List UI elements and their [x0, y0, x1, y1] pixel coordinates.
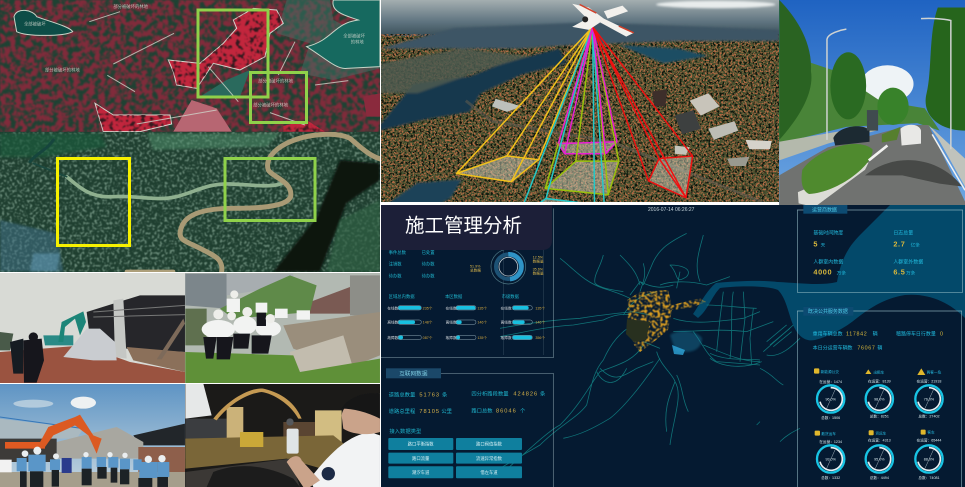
right data column: 人群室外数据	[893, 259, 923, 266]
vehicle donut charts: 总数：8251	[870, 414, 889, 419]
survey footprints	[456, 26, 694, 202]
vehicle donut charts: 总数：1506	[821, 415, 840, 420]
progress bars: 离线数	[387, 320, 399, 325]
right data column: 人群室内数据	[813, 259, 843, 266]
vehicle donut charts: 在运营：65444	[917, 438, 941, 443]
vehicle donut charts: 总数：4494	[870, 475, 889, 480]
left data column	[380, 208, 553, 487]
annotation labels and leader lines: 全部被破坏	[24, 20, 46, 27]
right data column: 运营商数据	[812, 206, 837, 213]
vehicle donut charts: 总数：1332	[821, 475, 840, 480]
river	[30, 134, 382, 272]
donut chart: 12.5%	[533, 255, 544, 259]
right data column: 重用车辆总数	[813, 330, 843, 337]
panel: traffic dashboard	[380, 205, 965, 487]
statistics text: 条	[442, 390, 448, 398]
progress bars: 235个	[423, 305, 433, 310]
progress bars: 在线数	[501, 305, 512, 310]
title block	[381, 205, 552, 250]
panel: inspectors in white shirts at rubble	[185, 273, 380, 384]
progress bars: 故障数	[501, 335, 512, 340]
data type buttons: 流速异常指数	[476, 455, 503, 462]
map: urban core traffic	[626, 290, 706, 355]
right data column: 4000	[813, 267, 832, 276]
statistics text: 道路总里程	[389, 407, 416, 415]
vehicle donut charts: 散货运车	[821, 431, 836, 436]
vehicle donut charts: 货运车	[875, 430, 887, 435]
right data column: 辆	[873, 330, 878, 337]
vehicle donut charts: 在运营：21918	[917, 378, 941, 383]
cars	[833, 126, 870, 146]
progress bars: 故障数	[446, 335, 457, 340]
annotation labels and leader lines: 部分被破坏的林地	[253, 102, 289, 109]
right data column: 稽路停车日行数量	[896, 330, 936, 337]
right data column: 本日分运营车辆数	[813, 345, 853, 352]
annotation labels and leader lines: 部分被破坏的林地	[45, 66, 80, 73]
annotation labels and leader lines: 的林地	[351, 38, 364, 45]
panel: road rendering	[779, 0, 965, 205]
data type buttons: 路口平衡指数	[408, 441, 434, 448]
title block: 施工管理分析	[405, 215, 522, 237]
donut chart: 数据量	[533, 258, 544, 263]
donut chart	[470, 249, 544, 284]
statistics text: 公里	[441, 408, 453, 415]
progress bars: 087个	[423, 335, 433, 340]
right data column: 117842	[846, 331, 867, 337]
donut chart: 51.9%	[470, 264, 481, 268]
right data column	[797, 205, 963, 487]
progress bars: 在线数	[387, 305, 399, 310]
icon: airplane	[572, 4, 634, 37]
left data column: 区域总内数据	[389, 293, 415, 300]
panel: satellite river map	[0, 132, 382, 272]
hedge	[798, 162, 869, 207]
trees	[779, 0, 811, 140]
vehicle donut charts: 96.0%	[825, 397, 837, 401]
progress bars: 故障数	[387, 335, 399, 340]
progress bars: 离线数	[501, 320, 512, 325]
right data column: 6.5	[893, 267, 906, 276]
panel: aerial survey photo	[381, 0, 779, 202]
data type buttons: 路口阀值指数	[476, 441, 503, 448]
vehicle donut charts: 总数：74081	[918, 475, 940, 480]
statistics text: 51763	[419, 392, 440, 398]
left data column: 已处置	[422, 249, 435, 256]
annotation labels and leader lines: 部分被破坏的林地	[113, 3, 149, 10]
vehicle donut charts: 客车	[927, 430, 935, 435]
vehicle donut charts: 76.0%	[924, 397, 935, 401]
statistics text: 路口总数	[471, 406, 493, 414]
vehicle donut charts: 在运营：8139	[868, 378, 891, 383]
right data column: 辆	[877, 345, 882, 352]
right data column: 万条	[906, 269, 916, 276]
icon group: bright red disturbed areas	[95, 8, 380, 132]
progress bars: 146个	[477, 320, 487, 325]
progress bars: 离线数	[446, 320, 457, 325]
panel: night noise measurement	[185, 384, 380, 487]
left data column: 市级数据	[502, 293, 520, 300]
vehicle donut charts: 95.0%	[874, 457, 885, 461]
progress bars: 在线数	[446, 305, 457, 310]
right data column: 76067	[857, 346, 875, 352]
right data column: 基础时间跨度	[813, 229, 843, 236]
left data column: 事件总数	[389, 249, 407, 256]
progress bars: 356个	[535, 335, 545, 340]
data type buttons: 路口流量	[412, 455, 430, 462]
statistics text: 条	[540, 390, 546, 398]
right data column: 亿条	[911, 241, 920, 248]
map: road network	[500, 233, 800, 475]
donut chart: 数据量	[533, 271, 544, 276]
statistics text: 86046	[496, 408, 517, 414]
statistics text: 个	[520, 407, 526, 414]
panel: infrared forest map	[0, 0, 380, 132]
right data column: 5	[813, 239, 818, 248]
left data column: 待办数	[422, 272, 435, 279]
vehicle donut charts: 两客一危	[927, 370, 942, 375]
left data column: 本区数据	[445, 293, 463, 300]
vehicle donut charts: 98.0%	[874, 397, 885, 401]
progress bars: 148个	[423, 320, 433, 325]
progress bars: 135个	[535, 305, 545, 310]
data type buttons: 借左车道	[480, 469, 498, 476]
left data column: 待办数	[422, 261, 435, 268]
progress bars: 135个	[477, 335, 487, 340]
right data column: 2.7	[893, 239, 906, 248]
statistics text: 四分析路段数量	[471, 390, 509, 398]
mottling inside red areas	[96, 8, 321, 132]
vehicle donut charts: 88.0%	[924, 457, 935, 461]
highlight box: green upper	[198, 10, 268, 97]
annotation labels and leader lines: 部分被破坏的林地	[258, 78, 294, 85]
progress bars: 146个	[535, 320, 545, 325]
right data column: 0	[940, 331, 944, 337]
right data column: 万条	[837, 269, 846, 276]
panel: building demolition with excavator	[0, 273, 185, 384]
donut chart: 35.6%	[533, 268, 544, 272]
annotation labels and leader lines	[24, 3, 366, 125]
vehicle donut charts: 93.0%	[825, 457, 837, 461]
statistics text: 424826	[513, 392, 538, 398]
vehicle donut charts: 在运营：1474	[819, 379, 842, 384]
data type buttons: 潮汐车道	[412, 469, 430, 476]
timestamp: 2016-07-14 06:26:27	[648, 207, 695, 213]
panel: excavator and officers in blue	[0, 384, 185, 487]
statistics text	[389, 390, 546, 435]
right data column: 日志总量	[893, 229, 913, 236]
highlight box: green lower	[250, 72, 306, 122]
map: water body	[693, 205, 965, 340]
progress bars	[387, 305, 545, 340]
vehicle donut charts: 新能源公交	[821, 369, 839, 374]
statistics text: 接入数据类型	[389, 427, 422, 435]
left data column: 注销数	[389, 261, 402, 268]
vehicle donut charts: 出租车	[873, 369, 885, 374]
right data column: 既决公共服务数据	[808, 308, 848, 315]
progress bars: 135个	[477, 305, 487, 310]
statistics text: 道路总数量	[389, 390, 416, 398]
vehicle donut charts: 在运营：4313	[868, 438, 891, 443]
data type buttons	[388, 438, 522, 478]
left data column: 待办数	[389, 272, 402, 279]
vehicle donut charts: 总数：27402	[918, 414, 940, 419]
vehicle donut charts	[814, 368, 943, 480]
statistics text: 78105	[419, 409, 440, 415]
highlight box: yellow	[58, 158, 130, 246]
city blocks	[492, 90, 772, 166]
highlight box: green	[225, 158, 315, 220]
vehicle donut charts: 在运营：1234	[819, 439, 842, 444]
left data column: 互联网数据	[399, 369, 428, 377]
donut chart: 总数据	[470, 267, 481, 272]
right data column: 天	[821, 242, 826, 248]
annotation labels and leader lines: 全部被破坏	[343, 32, 366, 39]
